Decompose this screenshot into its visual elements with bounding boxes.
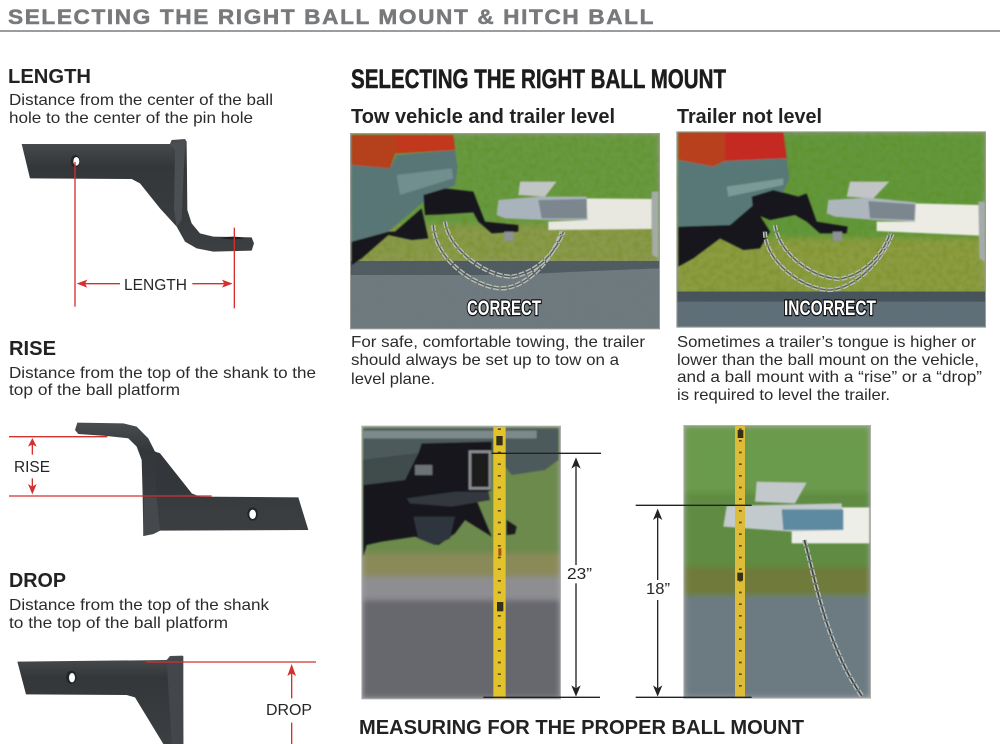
subheading: level: Tow vehicle and trailer level <box>351 106 615 128</box>
diagram: ball mount drop <box>17 656 316 744</box>
text: length description <box>9 92 273 127</box>
panel: length definition <box>8 66 273 308</box>
text: drop description <box>9 597 270 632</box>
label: correct: CORRECT <box>467 297 541 320</box>
heading: rise: RISE <box>9 338 56 360</box>
diagram: ball mount rise <box>9 423 308 536</box>
label: incorrect: INCORRECT <box>784 297 876 320</box>
tape measure <box>735 426 745 698</box>
subheading: not level: Trailer not level <box>677 106 822 128</box>
heading: drop: DROP <box>9 570 66 592</box>
panel: tow vehicle level <box>350 106 660 388</box>
photo: incorrect unlevel hitch <box>676 131 986 328</box>
photo: measuring trailer coupler height <box>636 425 871 699</box>
photo: correct level hitch <box>350 133 660 329</box>
panel: trailer not level <box>676 106 986 404</box>
text: drop description: to the top of the ball platform <box>9 615 228 632</box>
heading: measuring for the proper ball mount: MEASURING FOR THE PROPER BALL MOUNT <box>359 717 804 739</box>
text: rise description <box>9 365 316 399</box>
text: not level caption: is required to level the trailer. <box>677 387 890 404</box>
text: length description: Distance from the center of the ball <box>9 92 273 109</box>
text: level caption: level plane. <box>351 371 435 388</box>
text: rise description: Distance from the top of the shank to the <box>9 365 316 382</box>
text: not level caption <box>677 334 982 404</box>
text: level caption <box>351 334 646 388</box>
text: not level caption: lower than the ball mount on the vehicle, <box>677 352 979 369</box>
diagram: ball mount length <box>22 139 254 308</box>
text: length description: hole to the center of the pin hole <box>9 110 253 127</box>
panel: drop definition <box>9 570 316 744</box>
panel: rise definition <box>9 338 316 536</box>
page header banner: SELECTING THE RIGHT BALL MOUNT & HITCH BALL <box>8 6 655 29</box>
tape measure <box>493 427 506 698</box>
label: rise: RISE <box>14 459 50 476</box>
photo: measuring vehicle ball mount height <box>361 426 601 699</box>
heading: length: LENGTH <box>8 66 91 88</box>
text: not level caption: and a ball mount with a “rise” or a “drop” <box>677 369 982 386</box>
label: 18 inches: 18” <box>646 581 670 598</box>
text: level caption: For safe, comfortable towing, the trailer <box>351 334 646 351</box>
heading: selecting the right ball mount: SELECTING THE RIGHT BALL MOUNT <box>351 64 726 94</box>
label: length: LENGTH <box>124 277 187 294</box>
text: drop description: Distance from the top of the shank <box>9 597 270 614</box>
text: not level caption: Sometimes a trailer’s tongue is higher or <box>677 334 977 351</box>
label: drop: DROP <box>266 702 312 719</box>
label: 23 inches: 23” <box>567 566 592 583</box>
text: level caption: should always be set up to tow on a <box>351 352 619 369</box>
text: rise description: top of the ball platform <box>9 382 180 399</box>
